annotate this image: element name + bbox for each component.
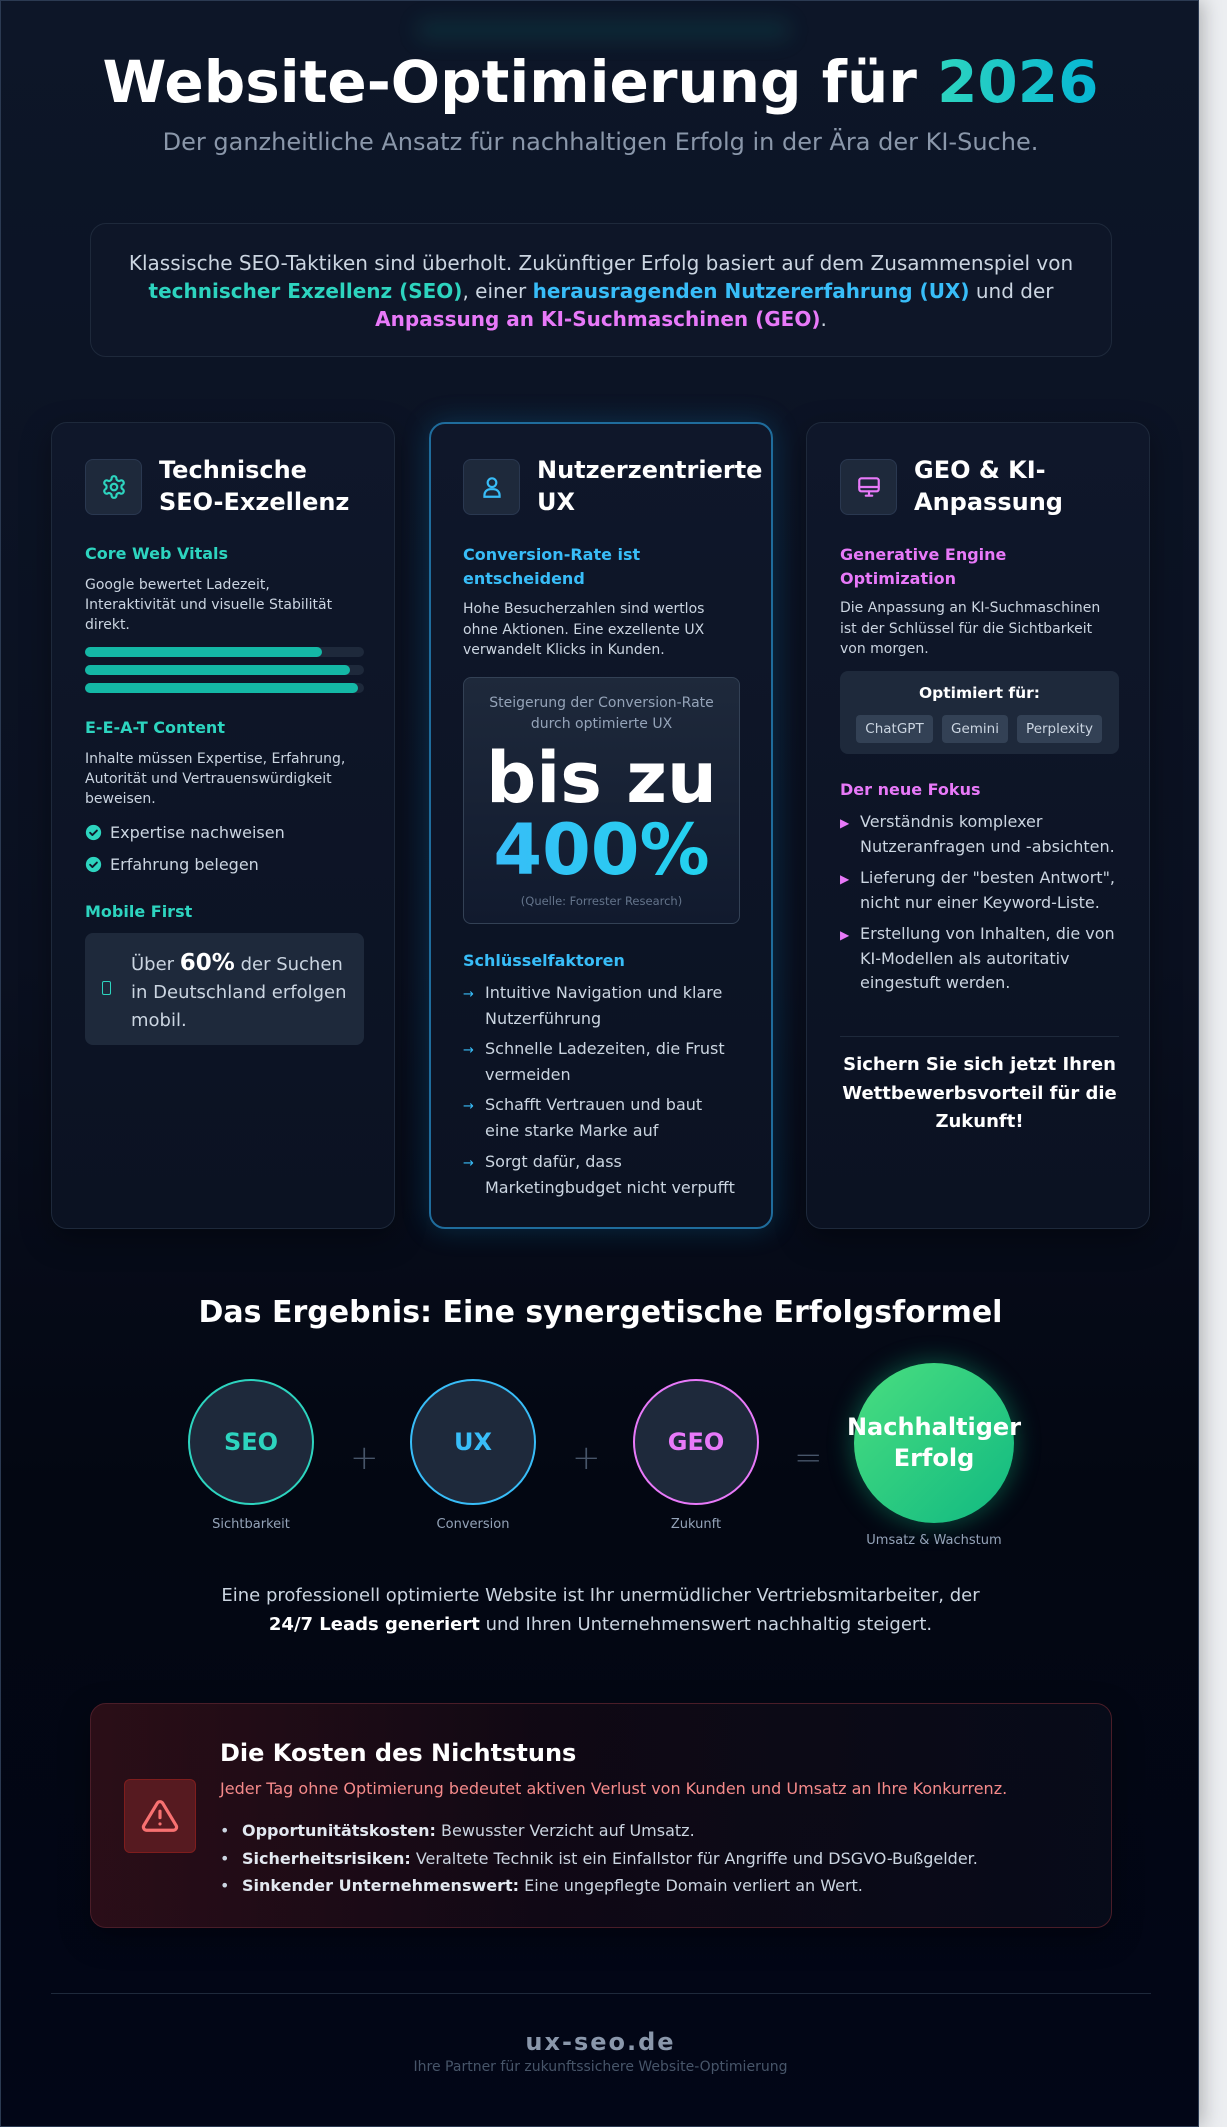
panel: GEO	[806, 422, 1150, 1229]
subtitle: Der ganzheitliche Ansatz für nachhaltigen Erfolg in der Ära der KI-Suche.	[163, 128, 1038, 156]
call to action: Sichern Sie sich jetzt Ihren	[843, 1054, 1116, 1075]
list: risks	[220, 1821, 978, 1895]
optimized-for box	[840, 671, 1119, 754]
list: risks: Sicherheitsrisiken: Veraltete Technik ist ein Einfallstor für Angriffe und DSGVO-Bußgelder.	[242, 1848, 978, 1868]
call to action: Zukunft!	[935, 1111, 1024, 1132]
text block: Die Anpassung an KI-Suchmaschinen	[840, 600, 1100, 616]
list: risks: •	[220, 1821, 229, 1840]
call to action: Wettbewerbsvorteil für die	[842, 1082, 1117, 1104]
panel: GEO: KI-Modellen als autoritativ	[860, 949, 1070, 968]
icon: monitor	[840, 459, 897, 515]
text block: conclusion	[221, 1585, 980, 1635]
panel: cost of inaction	[90, 1703, 1112, 1928]
intro text: technischer Exzellenz (SEO), einer herausragenden Nutzererfahrung (UX) und der	[149, 279, 1053, 303]
circle: result	[854, 1363, 1014, 1523]
subheading	[463, 545, 640, 588]
circle: SEO: SEO	[224, 1428, 278, 1456]
formula diagram: Conversion	[437, 1517, 509, 1532]
circle: GEO: GEO	[668, 1428, 724, 1456]
callout: mobile stat	[85, 933, 364, 1045]
callout: mobile stat: mobil.	[131, 1010, 187, 1031]
circle: UX: UX	[454, 1428, 492, 1456]
panel: GEO: eingestuft werden.	[860, 973, 1010, 992]
footer: ux-seo.de	[525, 2028, 676, 2056]
list: key factors: →	[463, 1043, 474, 1058]
subheading: Schlüsselfaktoren	[463, 951, 625, 970]
intro text	[129, 251, 1073, 331]
list: new focus: ▶	[840, 872, 849, 886]
text block: ist der Schlüssel für die Sichtbarkeit	[840, 620, 1092, 636]
subheading: Optimization	[840, 569, 956, 588]
intro box	[90, 223, 1112, 357]
list: new focus: nicht nur einer Keyword-Liste.	[860, 893, 1100, 912]
intro text: Anpassung an KI-Suchmaschinen (GEO).	[375, 307, 827, 331]
title: Website-Optimierung für 2026	[102, 48, 1099, 116]
subheading: Conversion-Rate ist	[463, 545, 640, 564]
heading: GEO & KI-	[914, 456, 1046, 484]
stat box	[463, 677, 740, 924]
heading	[914, 456, 1063, 516]
optimized-for box: Perplexity	[1026, 721, 1093, 737]
icon: phone	[102, 981, 111, 995]
list: key factors: Nutzerführung	[485, 1009, 601, 1028]
text block: direkt.	[85, 617, 130, 633]
list: new focus: Nutzeranfragen und -absichten.	[860, 837, 1115, 856]
heading	[159, 456, 349, 516]
list: new focus: ▶	[840, 816, 849, 830]
text block: beweisen.	[85, 791, 156, 807]
formula diagram	[188, 1349, 1028, 1548]
optimized-for box: Gemini	[951, 721, 999, 737]
bar chart	[85, 647, 364, 693]
list: risks: •	[220, 1848, 229, 1868]
heading: Anpassung	[914, 488, 1063, 516]
icon: gear	[85, 459, 142, 515]
subheading: Generative Engine	[840, 545, 1006, 564]
heading: Die Kosten des Nichtstuns	[220, 1739, 576, 1767]
list: new focus: Verständnis komplexer	[860, 812, 1042, 831]
text block: ohne Aktionen. Eine exzellente UX	[463, 622, 704, 638]
text block: verwandelt Klicks in Kunden.	[463, 642, 665, 658]
text block	[463, 601, 704, 658]
list: key factors: →	[463, 987, 474, 1002]
text block: conclusion: Eine professionell optimierte Website ist Ihr unermüdlicher Vertriebsmitarbeiter, der	[221, 1585, 980, 1606]
panel: UX	[429, 422, 773, 1229]
list: new focus	[840, 812, 1115, 992]
heading: Nutzerzentrierte	[537, 456, 762, 484]
circle: SEO	[188, 1379, 314, 1505]
formula diagram: +	[572, 1438, 600, 1478]
heading: UX	[537, 488, 575, 516]
list: key factors: →	[463, 1156, 474, 1171]
glow decoration	[416, 19, 791, 41]
list: key factors: vermeiden	[485, 1065, 571, 1084]
big number: bis zu	[486, 737, 717, 819]
list: new focus: Lieferung der "besten Antwort",	[860, 868, 1115, 887]
text block: Interaktivität und visuelle Stabilität	[85, 597, 332, 613]
icon: user	[463, 459, 520, 515]
text block: von morgen.	[840, 641, 929, 657]
list: risks: Opportunitätskosten: Bewusster Verzicht auf Umsatz.	[242, 1821, 695, 1840]
list: key factors: Intuitive Navigation und klare	[485, 983, 722, 1002]
checklist: Erfahrung belegen	[110, 855, 259, 874]
intro text: Klassische SEO-Taktiken sind überholt. Zukünftiger Erfolg basiert auf dem Zusammenspiel von	[129, 251, 1073, 275]
callout: mobile stat: in Deutschland erfolgen	[131, 982, 347, 1003]
text block	[840, 600, 1100, 657]
footer	[414, 2028, 787, 2075]
optimized-for box: Optimiert für:	[919, 684, 1040, 702]
subheading: mobile first: Mobile First	[85, 902, 192, 921]
list: new focus: Erstellung von Inhalten, die von	[860, 924, 1115, 943]
section heading: formula: Das Ergebnis: Eine synergetische Erfolgsformel	[199, 1295, 1002, 1330]
heading: Technische	[159, 456, 307, 484]
subheading: EEAT: E-E-A-T Content	[85, 718, 225, 737]
list: key factors: Marketingbudget nicht verpufft	[485, 1178, 735, 1197]
footer: Ihre Partner für zukunftssichere Website-Optimierung	[414, 2059, 787, 2075]
stat box: Steigerung der Conversion-Rate	[489, 695, 714, 711]
stat box: 400%	[493, 809, 710, 891]
heading	[537, 456, 762, 516]
formula diagram: Umsatz & Wachstum	[866, 1533, 1002, 1548]
list: key factors: Sorgt dafür, dass	[485, 1152, 622, 1171]
subheading	[840, 545, 1006, 588]
list: key factors: →	[463, 1099, 474, 1114]
subtitle: Jeder Tag ohne Optimierung bedeutet aktiven Verlust von Kunden und Umsatz an Ihre Konkurrenz.	[220, 1779, 1007, 1798]
stat box: durch optimierte UX	[531, 716, 672, 732]
text block	[85, 577, 332, 633]
checklist: Expertise nachweisen	[110, 823, 285, 842]
text block: Inhalte müssen Expertise, Erfahrung,	[85, 751, 345, 767]
optimized-for box: ChatGPT	[865, 721, 924, 737]
text block: Autorität und Vertrauenswürdigkeit	[85, 771, 332, 787]
checklist	[86, 823, 285, 874]
circle: GEO	[633, 1379, 759, 1505]
list: key factors: Schafft Vertrauen und baut	[485, 1095, 702, 1114]
list: risks: •	[220, 1876, 229, 1895]
callout: mobile stat: Über 60% der Suchen	[131, 950, 343, 976]
text block: Hohe Besucherzahlen sind wertlos	[463, 601, 704, 617]
list: key factors: eine starke Marke auf	[485, 1121, 658, 1140]
circle: result: Nachhaltiger	[847, 1413, 1021, 1441]
panel: technical SEO	[51, 422, 395, 1229]
text block	[85, 751, 345, 807]
formula diagram: +	[350, 1438, 378, 1478]
formula diagram: =	[794, 1438, 822, 1478]
circle: UX	[410, 1379, 536, 1505]
subheading: core web vitals: Core Web Vitals	[85, 544, 228, 563]
heading: SEO-Exzellenz	[159, 488, 349, 516]
subheading: Der neue Fokus	[840, 780, 980, 799]
list: risks: Sinkender Unternehmenswert: Eine ungepflegte Domain verliert an Wert.	[242, 1876, 863, 1895]
formula diagram: Zukunft	[671, 1517, 721, 1532]
formula diagram: Sichtbarkeit	[212, 1517, 290, 1532]
call to action	[842, 1054, 1117, 1132]
list: new focus: ▶	[840, 928, 849, 942]
list: key factors	[463, 983, 735, 1197]
text block: Google bewertet Ladezeit,	[85, 577, 270, 593]
stat box: (Quelle: Forrester Research)	[521, 894, 682, 908]
icon: warning	[124, 1779, 196, 1853]
subheading: entscheidend	[463, 569, 585, 588]
circle: result: Erfolg	[894, 1444, 974, 1472]
list: key factors: Schnelle Ladezeiten, die Frust	[485, 1039, 725, 1058]
text block: conclusion: 24/7 Leads generiert und Ihren Unternehmenswert nachhaltig steigert.	[269, 1614, 932, 1635]
